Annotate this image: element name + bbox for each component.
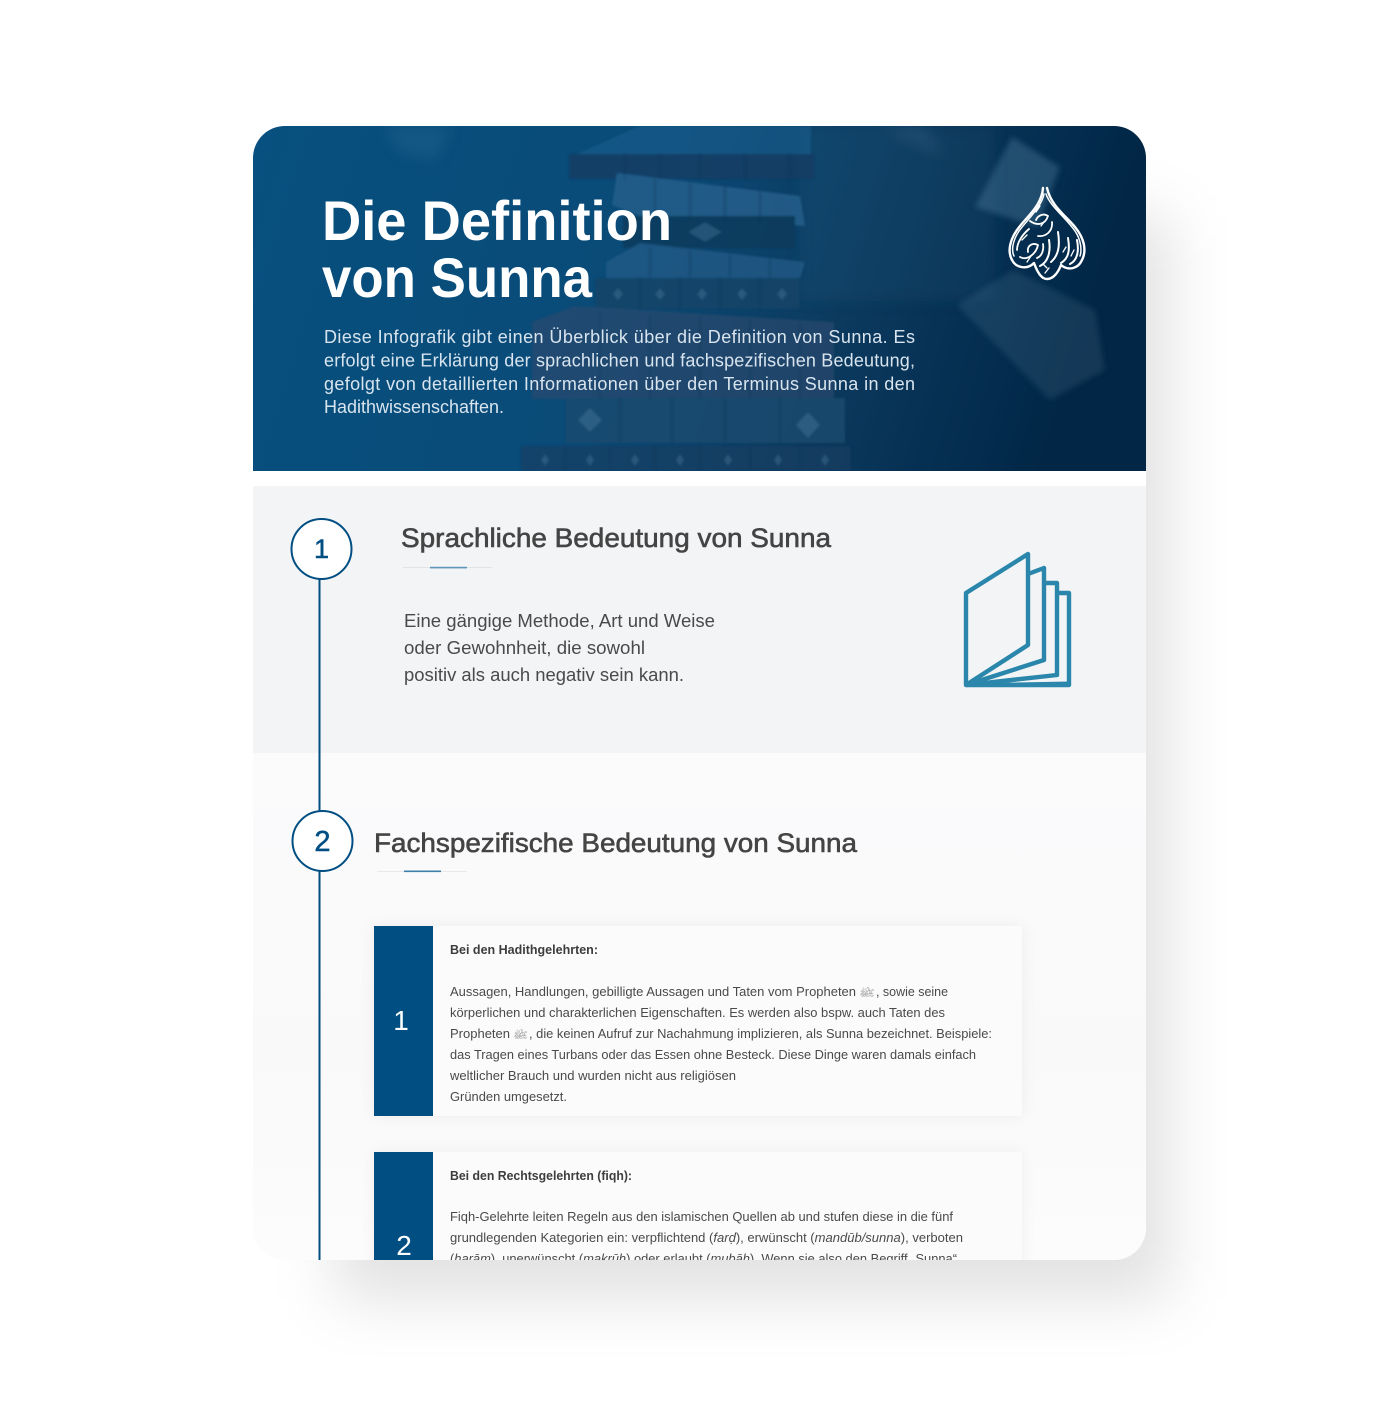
card: Hadith scholars: das Tragen eines Turbans oder das Essen ohne Besteck. Diese Dinge waren damals einfach <box>450 1047 976 1062</box>
card: Hadith scholars: Aussagen, Handlungen, gebilligte Aussagen und Taten vom Propheten <box>450 984 856 999</box>
card: Hadith scholars <box>374 926 1022 1116</box>
card: Hadith scholars: ﷺ <box>513 1028 528 1040</box>
timeline line <box>318 578 320 1260</box>
intro text block: Hadithwissenschaften. <box>324 397 504 417</box>
title: Die Definition <box>322 189 672 252</box>
card: Hadith scholars: Bei den Hadithgelehrten: <box>450 942 598 957</box>
card: Hadith scholars: , sowie seine <box>876 984 948 999</box>
card: Hadith scholars: 1 <box>393 1005 409 1036</box>
icon: open book <box>966 554 1069 685</box>
card drop shadow <box>335 215 1170 1300</box>
definition text: positiv als auch negativ sein kann. <box>404 664 684 685</box>
heading: Fachspezifische Bedeutung von Sunna: Fachspezifische Bedeutung von Sunna <box>374 828 858 858</box>
intro text block: erfolgt eine Erklärung der sprachlichen und fachspezifischen Bedeutung, <box>324 350 915 370</box>
card: Fiqh scholars: Bei den Rechtsgelehrten (fiqh): <box>450 1168 632 1183</box>
infographic card <box>253 126 1146 1282</box>
panel: header banner <box>253 126 1146 471</box>
card: Hadith scholars: körperlichen und charakterlichen Eigenschaften. Es werden also bspw. auch Taten des <box>450 1005 945 1020</box>
timeline marker 2 <box>292 811 352 871</box>
card: Fiqh scholars: grundlegenden Kategorien ein: verpflichtend (farḍ), erwünscht (mandūb/sunna), verboten <box>450 1230 963 1245</box>
heading: Sprachliche Bedeutung von Sunna: Sprachliche Bedeutung von Sunna <box>401 523 832 553</box>
definition text: Eine gängige Methode, Art und Weise <box>404 610 715 631</box>
timeline marker 2: 2 <box>314 826 331 858</box>
card: Fiqh scholars: (ḥarām), unerwünscht (makrūh) oder erlaubt (mubāḥ). Wenn sie also den Begriff „Sunna“ <box>450 1251 957 1266</box>
title <box>322 200 669 298</box>
timeline marker 1: 1 <box>314 534 329 564</box>
icon: calligraphic logo <box>1010 188 1084 279</box>
card: Hadith scholars: Propheten <box>450 1026 510 1041</box>
card: Fiqh scholars: 2 <box>396 1230 412 1261</box>
intro text block <box>324 327 915 417</box>
card: Fiqh scholars: Fiqh-Gelehrte leiten Regeln aus den islamischen Quellen ab und stufen diese in die fünf <box>450 1209 953 1224</box>
panel: technical meaning <box>368 832 1028 1260</box>
definition text <box>404 610 715 685</box>
panel: linguistic meaning <box>253 486 1146 753</box>
timeline marker 1 <box>292 519 352 579</box>
card: Hadith scholars: weltlicher Brauch und wurden nicht aus religiösen <box>449 1068 736 1083</box>
card: Hadith scholars: ﷺ <box>859 986 875 998</box>
card: Fiqh scholars <box>374 1152 962 1260</box>
intro text block: Diese Infografik gibt einen Überblick über die Definition von Sunna. Es <box>324 327 915 347</box>
definition text: oder Gewohnheit, die sowohl <box>404 637 645 658</box>
intro text block: gefolgt von detaillierten Informationen über den Terminus Sunna in den <box>324 374 915 394</box>
card: Hadith scholars: Gründen umgesetzt. <box>450 1089 567 1104</box>
title: von Sunna <box>322 246 593 309</box>
header background: stack of books and flying pages <box>384 126 1105 471</box>
card: Hadith scholars: , die keinen Aufruf zur Nachahmung implizieren, als Sunna bezeichnet. Beispiele: <box>529 1026 992 1041</box>
